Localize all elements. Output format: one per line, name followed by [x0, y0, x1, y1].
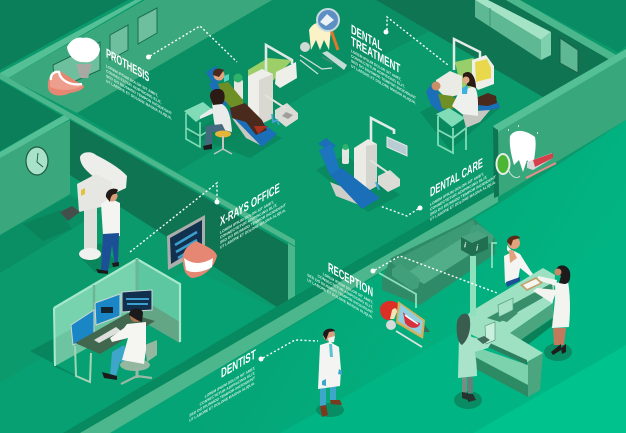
- toothbrush: [526, 163, 556, 178]
- wing shadow: [517, 318, 553, 347]
- heading: prothesis: PROTHESIS: [106, 45, 149, 85]
- callout line: prothesis: [146, 26, 237, 62]
- front end: [528, 353, 543, 397]
- scene: x-ray viewing cubicle: [30, 259, 180, 384]
- text block: prothesis: LOREM IPSUM DOLOR SIT AMET,: [106, 63, 158, 98]
- sparkles: [508, 126, 538, 133]
- chair back: [426, 83, 448, 112]
- floor: darker band under prothesis wall: [77, 0, 430, 172]
- chair back: [318, 138, 336, 150]
- patient: [432, 82, 440, 90]
- text block: dental treatment: UT LABORE ET DOLORE MAGNA ALIQUA.: [351, 63, 416, 106]
- text block: dental treatment: CONSECTETUR ADIPISCING ELIT,: [351, 53, 405, 89]
- text block: dental care: UT LABORE ET DOLORE MAGNA ALIQUA.: [430, 179, 496, 222]
- icon: wall clock: [26, 147, 48, 175]
- technician coat: [101, 198, 120, 236]
- text block: dentist: CONSECTETUR ADIPISCING ELIT,: [200, 370, 255, 407]
- shadow: [30, 339, 90, 383]
- left arm: [392, 264, 420, 290]
- wall caps: [54, 259, 180, 342]
- text block: x-rays office: LOREM IPSUM DOLOR SIT AMET,: [220, 199, 274, 235]
- dentist hair: [210, 89, 225, 105]
- scene: x-ray machine: [23, 152, 127, 274]
- instrument table: [184, 102, 213, 122]
- wall: x-ray room end post: [288, 243, 295, 316]
- tray: [275, 103, 298, 127]
- text block: prothesis: CONSECTETUR ADIPISCING ELIT,: [106, 68, 161, 105]
- chair base: [330, 182, 362, 206]
- icon: x-ray dentures: [183, 241, 217, 278]
- table: [436, 108, 465, 127]
- floor shadow left: [23, 210, 72, 241]
- text block: dental care: CONSECTETUR ADIPISCING ELIT,: [430, 174, 487, 212]
- tray: [378, 170, 400, 192]
- dentist pants: [205, 124, 226, 146]
- scene: sofa: [379, 218, 497, 308]
- shadow: [316, 155, 400, 212]
- icon: tooth care set: [496, 126, 556, 178]
- patient torso: [218, 82, 243, 108]
- floor: reception: [110, 120, 626, 433]
- sofa silhouette: [382, 218, 495, 305]
- column: [84, 180, 97, 252]
- monitors: [71, 310, 94, 345]
- lamp arm: [454, 39, 480, 70]
- text block: dental care: LOREM IPSUM DOLOR SIT AMET,: [430, 171, 484, 207]
- wall: right wall edge: [493, 127, 499, 198]
- icon: info sign: i: [476, 242, 479, 253]
- floor: lower shadow along partition: [63, 178, 500, 433]
- text block: dental treatment: LOREM IPSUM DOLOR SIT AMET,: [351, 48, 401, 82]
- front dark base: [474, 357, 528, 397]
- text block: x-rays office: UT LABORE ET DOLORE MAGNA ALIQUA.: [220, 207, 286, 250]
- wall: far right strip: [506, 0, 618, 60]
- wall: partition strip: [80, 190, 498, 433]
- floor: darker band lower left: [0, 195, 100, 273]
- wall: long diagonal strip: [0, 73, 295, 246]
- bottle: [342, 148, 349, 164]
- technician pants: [101, 233, 119, 272]
- toothpaste: [527, 153, 553, 170]
- front light panel: [473, 346, 528, 386]
- floor: bottom right brighter band: [473, 345, 626, 433]
- back walls: [53, 259, 137, 366]
- monitor: [472, 55, 494, 90]
- wall: left clock wall: [0, 120, 70, 235]
- lamp arm: [266, 45, 292, 72]
- patient legs: [230, 103, 267, 135]
- text block: reception: UT LABORE ET DOLORE MAGNA ALIQUA.: [307, 277, 373, 320]
- heading: reception: RECEPTION: [328, 259, 373, 300]
- heading: dental care: DENTAL CARE: [430, 154, 483, 200]
- callout line: x-rays: [130, 183, 220, 252]
- floss box: [496, 153, 510, 175]
- sofa back cushions: [391, 220, 478, 274]
- text block: dentist: UT LABORE ET DOLORE MAGNA ALIQUA.: [189, 380, 255, 423]
- wall: top left dark corner: [0, 0, 128, 70]
- wall: right wall dental care: [494, 52, 626, 197]
- front legs rails: [379, 273, 416, 308]
- unit: [436, 71, 462, 98]
- sofa seat: [405, 232, 488, 284]
- light beam: [248, 58, 292, 94]
- person: receptionist man: [504, 236, 533, 287]
- person: dentist in white coat: [316, 329, 344, 417]
- text block: reception: LOREM IPSUM DOLOR SIT AMET,: [323, 271, 373, 305]
- shadow: [420, 92, 500, 150]
- scene: reception desk: [458, 268, 555, 397]
- callout line: dental treatment: [384, 17, 448, 65]
- heading: dental treatment: [351, 21, 400, 77]
- right arm: [470, 224, 494, 244]
- floor: middle band: [280, 233, 626, 433]
- icon: syringe and dental tools: [300, 42, 347, 74]
- heading: dental treatment: DENTAL: [351, 21, 382, 54]
- wing front: [510, 303, 553, 342]
- callout line: dental care: [380, 206, 422, 216]
- wall: left upper dark room: [0, 80, 62, 151]
- icon: info sign: i: [464, 239, 467, 250]
- icon: info sign: [461, 231, 488, 316]
- text block: dentist: LOREM IPSUM DOLOR SIT AMET,: [205, 365, 255, 399]
- text block: x-rays office: SED DO EIUSMOD TEMPOR INCIDIDUNT: [220, 202, 286, 245]
- machine body: [77, 174, 112, 212]
- technician head: [106, 190, 118, 202]
- person: doctor with clipboard: [520, 265, 572, 361]
- text block: prothesis: UT LABORE ET DOLORE MAGNA ALIQUA.: [106, 78, 172, 121]
- lamp: [275, 62, 297, 88]
- wall: x-ray room dark wall: [70, 120, 288, 314]
- green bottle: [234, 79, 243, 101]
- heading: dentist: DENTIST: [221, 346, 256, 381]
- technician shoes: [96, 269, 108, 274]
- chair foot: [478, 102, 500, 112]
- text block: dental care: SED DO EIUSMOD TEMPOR INCIDIDUNT: [430, 174, 496, 217]
- callout line: dentist: [258, 340, 318, 362]
- door on back wall: [560, 38, 578, 73]
- light: [455, 58, 490, 92]
- text block: dental treatment: SED DO EIUSMOD TEMPOR INCIDIDUNT: [351, 58, 416, 101]
- text block: x-rays office: CONSECTETUR ADIPISCING ELIT,: [220, 202, 277, 240]
- dentist coat: [212, 102, 232, 132]
- text block: dentist: SED DO EIUSMOD TEMPOR INCIDIDUNT: [189, 375, 256, 418]
- arm: [371, 118, 394, 142]
- icon: teeth and magnifier: [309, 9, 339, 50]
- doctor head: [130, 310, 142, 322]
- wall frames: [53, 8, 157, 90]
- wall: top strip: [0, 0, 142, 78]
- text block: reception: CONSECTETUR ADIPISCING ELIT,: [318, 273, 373, 310]
- machine head: [80, 152, 127, 195]
- chair seat: [228, 106, 277, 147]
- scene: dental treatment chair with dentist: [420, 39, 500, 153]
- desk: [75, 313, 155, 354]
- floor shadow right: [78, 243, 120, 272]
- scene: empty dental chair: [316, 118, 407, 212]
- wall: back right dark wall: [376, 0, 610, 97]
- desk trough: [487, 283, 553, 322]
- heading: dental treatment: TREATMENT: [351, 33, 400, 77]
- wall: clock wall top strip: [0, 115, 70, 158]
- icon: apple, mirror and smile frame: [380, 301, 430, 347]
- icon: x-ray monitor: [167, 215, 205, 270]
- dental unit: [248, 69, 273, 125]
- keyboard: [94, 327, 121, 343]
- wall: far right corner room: [520, 0, 626, 52]
- control panel: [60, 206, 80, 221]
- patient head: [214, 70, 224, 80]
- doctor pants: [110, 345, 128, 376]
- laptop: [498, 298, 513, 317]
- chair base: [232, 118, 262, 146]
- icon: dentures: [48, 71, 84, 96]
- callout line: reception: [370, 256, 497, 293]
- chair: [145, 340, 157, 362]
- floor: lounge shade: [0, 268, 288, 433]
- icon: dental implant crown: [67, 37, 100, 78]
- doctor coat: [110, 322, 146, 364]
- unit: [354, 139, 377, 192]
- chair shadow: [190, 112, 282, 158]
- wall: prothesis room back wall: [8, 0, 272, 113]
- chair seat: [330, 168, 380, 209]
- dentist: [452, 86, 478, 116]
- wall: right wall top strip: [493, 49, 626, 132]
- person: doctor in mint coat: [454, 314, 495, 409]
- heading: x-rays office: X-RAYS OFFICE: [220, 179, 280, 229]
- monitor: [387, 137, 407, 156]
- front trough: [488, 343, 527, 365]
- scene: prothesis dental chair with patient: [184, 45, 298, 158]
- tooth: [510, 131, 536, 172]
- stool: [215, 130, 231, 138]
- scene: cabinet on back wall: [475, 0, 551, 60]
- top: [458, 268, 555, 362]
- text block: reception: SED DO EIUSMOD TEMPOR INCIDIDUNT: [307, 272, 374, 315]
- desk legs: [75, 346, 91, 382]
- text block: prothesis: SED DO EIUSMOD TEMPOR INCIDIDUNT: [106, 73, 172, 116]
